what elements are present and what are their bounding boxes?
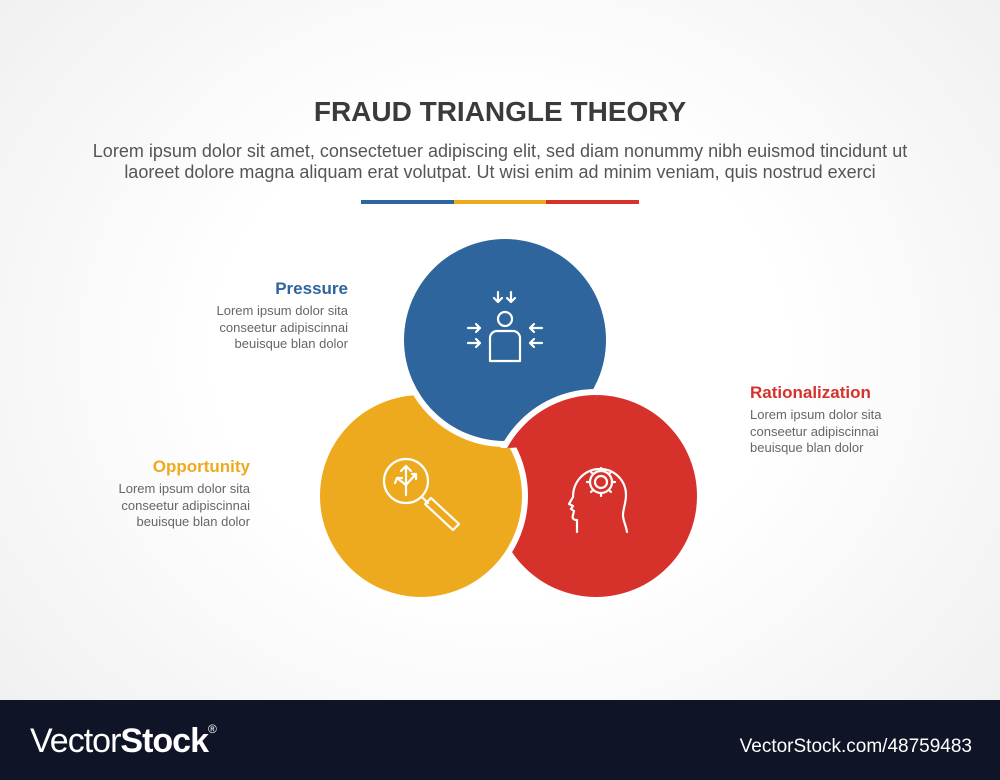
text: pressure: Pressure (275, 279, 348, 298)
text: rationalization (750, 383, 882, 455)
footer id: VectorStock.com/48759483 (740, 736, 972, 757)
icon: head with gear (569, 468, 627, 532)
footer logo: VectorStock® (30, 722, 216, 760)
title: FRAUD TRIANGLE THEORY (314, 96, 686, 127)
circle: rationalization (495, 395, 697, 597)
diagram: three circles (320, 239, 697, 597)
icon: person under pressure (468, 292, 542, 361)
text: pressure: beuisque blan dolor (235, 336, 348, 351)
text: rationalization: Lorem ipsum dolor sita (750, 407, 882, 422)
circle: pressure (404, 239, 606, 441)
subtitle text (93, 141, 908, 182)
text: opportunity: conseetur adipiscinnai (121, 498, 250, 512)
text: pressure: Lorem ipsum dolor sita (216, 303, 348, 318)
text: rationalization: beuisque blan dolor (750, 440, 863, 455)
text: opportunity (118, 457, 250, 529)
text: opportunity: beuisque blan dolor (137, 514, 250, 529)
text: rationalization: conseetur adipiscinnai (750, 424, 879, 438)
subtitle text: laoreet dolore magna aliquam erat volutpat. Ut wisi enim ad minim veniam, quis nostrud exerci (124, 162, 876, 182)
text: opportunity: Opportunity (153, 457, 250, 476)
footer bar (0, 700, 1000, 780)
text: opportunity: Lorem ipsum dolor sita (118, 481, 250, 496)
text: pressure (216, 279, 348, 351)
subtitle text: Lorem ipsum dolor sit amet, consectetuer adipiscing elit, sed diam nonummy nibh euismod tincidunt ut (93, 141, 907, 161)
text: pressure: conseetur adipiscinnai (219, 320, 348, 334)
tricolor divider (361, 200, 639, 204)
icon: magnifier with arrows (384, 459, 459, 530)
circle: opportunity (320, 395, 522, 597)
text: rationalization: Rationalization (750, 383, 871, 402)
